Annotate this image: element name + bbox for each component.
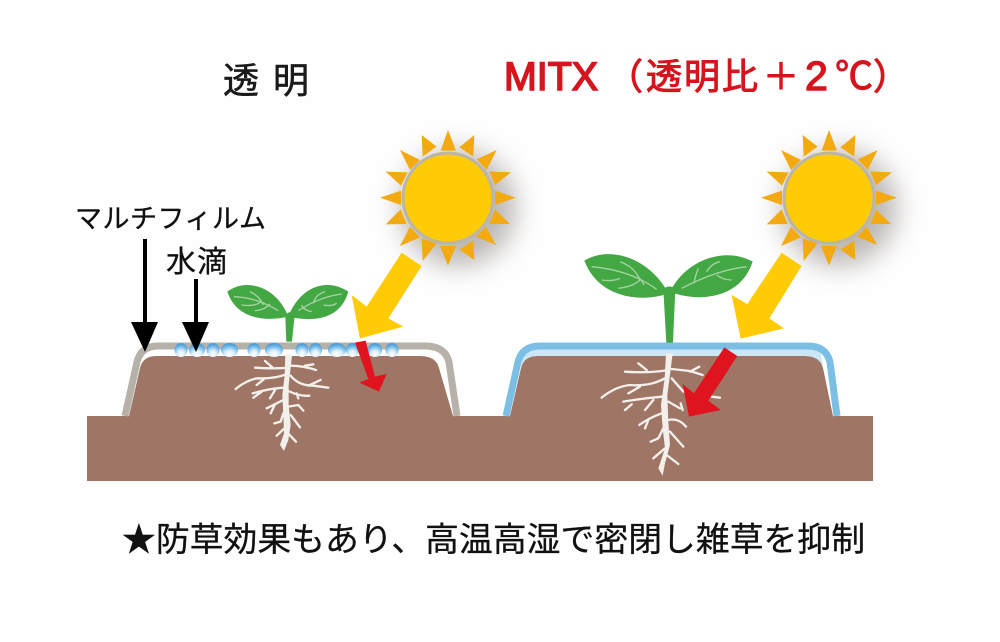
seedling bbox=[227, 285, 348, 342]
inner film highlight bbox=[521, 347, 823, 368]
title: MITX film bbox=[504, 53, 909, 99]
sun bbox=[761, 130, 897, 266]
arrow: sunlight bbox=[352, 253, 422, 338]
arrow: to mulch film bbox=[131, 239, 158, 352]
title: transparent film: 透明 bbox=[223, 60, 309, 101]
arrow: to water droplets bbox=[182, 279, 209, 352]
arrow: large heat transmission bbox=[683, 347, 737, 417]
arrow: sunlight bbox=[732, 253, 802, 339]
title: MITX film: MITX bbox=[504, 55, 598, 99]
label: water droplets: 水滴 bbox=[166, 246, 227, 279]
roots bbox=[236, 354, 328, 451]
seedling bbox=[584, 254, 753, 343]
caption: ★防草効果もあり、高温高湿で密閉し雑草を抑制 bbox=[122, 521, 865, 559]
mulch film: blue bbox=[506, 346, 837, 416]
title: MITX film: ℃ bbox=[835, 56, 873, 98]
roots bbox=[602, 353, 720, 476]
title: MITX film: ） bbox=[873, 56, 909, 97]
sun bbox=[380, 130, 516, 266]
arrow: small heat transmission bbox=[355, 341, 387, 392]
mulch film: grey bbox=[125, 346, 457, 416]
title: MITX film: （透明比＋ bbox=[607, 56, 799, 97]
label: mulch film: マルチフィルム bbox=[75, 204, 266, 234]
soil ground with both beds bbox=[87, 356, 873, 481]
title: MITX film: 2 bbox=[805, 53, 828, 99]
panel: MITX film bed bbox=[506, 130, 897, 476]
water droplets bbox=[174, 343, 398, 357]
panel: transparent film bed bbox=[75, 130, 516, 451]
